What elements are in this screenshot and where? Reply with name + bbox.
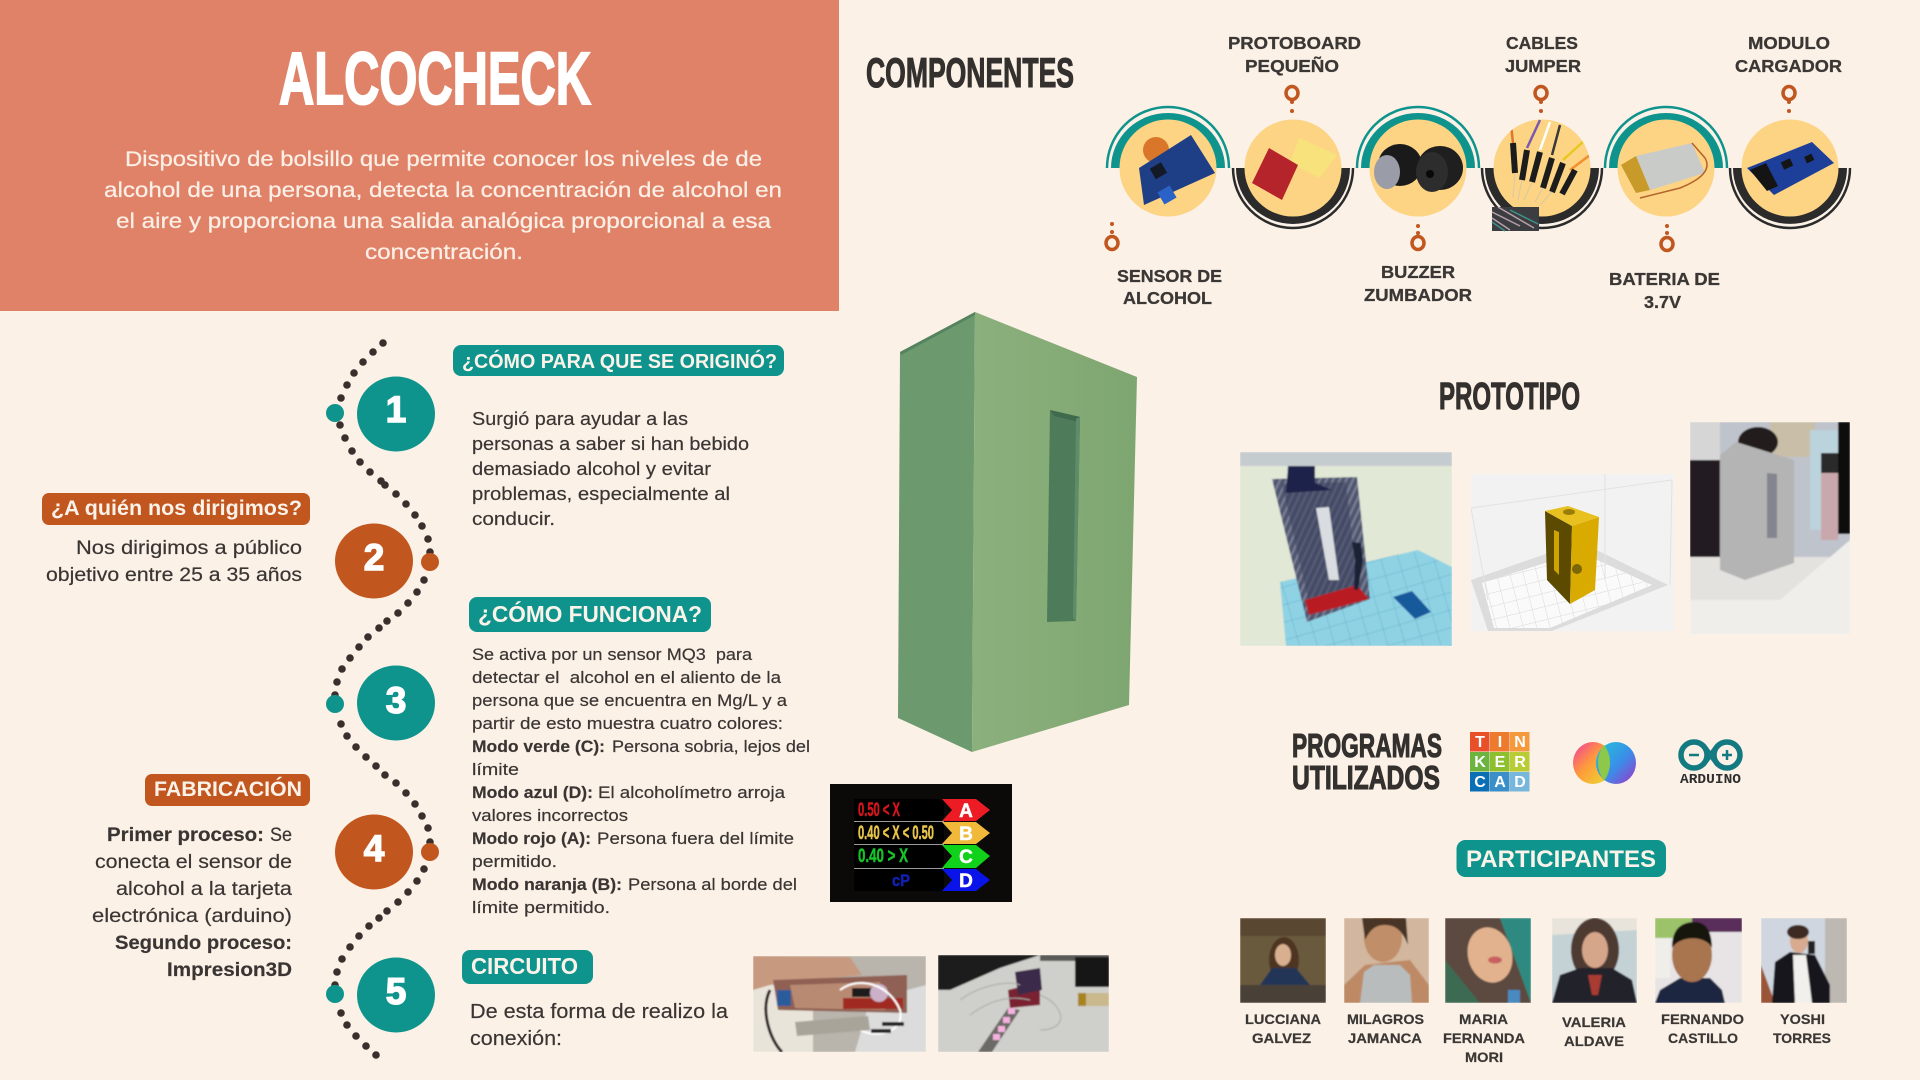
icon: tinkercad logo: R	[1514, 754, 1526, 771]
text block: how it works: Modo azul (D):	[472, 784, 593, 802]
image: slicer model	[1471, 474, 1674, 631]
name	[1245, 1011, 1321, 1046]
text block: description: Dispositivo de bolsillo que permite conocer los niveles de de	[125, 147, 762, 171]
step 5 marker: 5	[386, 971, 406, 1012]
text block: how it works: Se activa por un sensor MQ3 para	[472, 646, 753, 664]
component: buzzer	[1357, 107, 1479, 305]
panel: header	[0, 0, 839, 311]
label: PROTOBOARD	[1228, 33, 1361, 53]
text block: fabrication: Impresion3D	[167, 959, 292, 981]
participant: milagros	[1344, 914, 1429, 1046]
component: sensor de alcohol	[1106, 107, 1229, 308]
text block: how it works: Persona fuera del límite	[597, 830, 794, 848]
heading: fabricacion	[145, 774, 310, 806]
label	[1117, 266, 1222, 308]
image: alcohol level chart: D	[959, 871, 973, 892]
image: tinkercad model	[1240, 452, 1452, 646]
image: alcohol level chart: C	[959, 847, 973, 868]
heading: a quien nos dirigimos	[42, 493, 310, 525]
text block: origin: problemas, especialmente al	[472, 484, 730, 504]
text block: fabrication: alcohol a la tarjeta	[116, 878, 292, 900]
text block: fabrication: Segundo proceso:	[115, 932, 292, 954]
name: LUCCIANA	[1245, 1011, 1321, 1027]
text block: how it works: Persona al borde del	[628, 876, 797, 894]
label	[1735, 33, 1842, 76]
text block: how it works: valores incorrectos	[472, 807, 628, 825]
participant: fernando	[1655, 918, 1744, 1046]
icon: tinkercad logo: N	[1514, 734, 1526, 751]
label: MODULO	[1748, 33, 1830, 53]
image: alcohol level chart	[830, 784, 1012, 902]
heading: como para que se origino	[453, 345, 784, 376]
participant: yoshi	[1761, 918, 1847, 1046]
image: alcohol level chart: 0.40 < X < 0.50	[858, 823, 934, 844]
icon: tinkercad logo	[1470, 732, 1530, 792]
heading: fabricacion: FABRICACIÓN	[154, 777, 302, 801]
step 3 marker	[326, 666, 435, 740]
image: alcohol level chart: 0.50 < X	[858, 800, 900, 821]
label	[1609, 269, 1720, 312]
icon: tinkercad logo: T	[1475, 734, 1485, 751]
name: MORI	[1465, 1049, 1503, 1065]
photo: circuit with LEDs	[938, 955, 1109, 1052]
name: MARIA	[1459, 1011, 1508, 1027]
text block: description: concentración.	[365, 240, 523, 264]
step 5 marker	[326, 958, 435, 1032]
text block: fabrication: Primer proceso:	[107, 824, 264, 846]
icon: arduino logo: ARDUINO	[1680, 772, 1741, 788]
dotted timeline path	[331, 339, 434, 1059]
label: JUMPER	[1505, 56, 1581, 76]
heading: componentes: COMPONENTES	[866, 49, 1074, 96]
title: ALCOCHECK	[279, 37, 591, 120]
text block: how it works: partir de esto muestra cuatro colores:	[472, 715, 783, 733]
text block: origin: demasiado alcohol y evitar	[472, 459, 711, 479]
text block: description: alcohol de una persona, detecta la concentración de alcohol en	[104, 178, 782, 202]
text block: circuit: De esta forma de realizo la	[470, 1001, 729, 1023]
text block: how it works: El alcoholímetro arroja	[598, 784, 786, 802]
text block: how it works: límite permitido.	[472, 899, 610, 917]
text block: how it works: límite	[472, 761, 519, 779]
text block: origin: conducir.	[472, 509, 555, 529]
heading: programas utilizados: PROGRAMAS	[1292, 727, 1442, 764]
text block: origin: Surgió para ayudar a las	[472, 409, 688, 429]
overflow image corner	[1492, 207, 1539, 231]
component: cables jumper	[1482, 33, 1602, 231]
heading: como funciona: ¿CÓMO FUNCIONA?	[478, 600, 702, 627]
step 2 marker	[335, 524, 439, 598]
text block: audience: objetivo entre 25 a 35 años	[46, 565, 302, 586]
heading: programas utilizados: UTILIZADOS	[1292, 759, 1440, 796]
name	[1773, 1011, 1831, 1046]
photo: circuit in hand	[753, 956, 926, 1052]
image: alcohol level chart: B	[959, 824, 973, 845]
pin	[1106, 222, 1118, 250]
pin	[1783, 86, 1795, 113]
participant: maria	[1443, 918, 1531, 1065]
component: bateria	[1605, 107, 1727, 312]
heading: prototipo: PROTOTIPO	[1439, 376, 1580, 418]
text block: how it works: Modo verde (C):	[472, 738, 605, 756]
text block: circuit: conexión:	[470, 1028, 562, 1050]
icon: tinkercad logo: A	[1494, 774, 1506, 791]
name: ALDAVE	[1564, 1033, 1624, 1049]
text block: how it works: Modo rojo (A):	[472, 830, 591, 848]
icon: tinkercad logo: C	[1474, 774, 1486, 791]
pin	[1661, 224, 1673, 250]
text block: circuit	[470, 1001, 729, 1050]
name: CASTILLO	[1668, 1030, 1738, 1046]
label: PEQUEÑO	[1245, 55, 1339, 76]
heading: circuito: CIRCUITO	[471, 953, 578, 979]
text block: audience	[46, 538, 302, 586]
name: YOSHI	[1780, 1011, 1825, 1027]
heading: a quien nos dirigimos: ¿A quién nos dirigimos?	[51, 497, 302, 520]
heading: programas utilizados	[1292, 727, 1442, 796]
heading: circuito	[462, 950, 593, 984]
label: CABLES	[1506, 33, 1578, 53]
step 1 marker	[326, 376, 435, 452]
text block: how it works	[472, 646, 810, 917]
text block: audience: Nos dirigimos a público	[76, 538, 302, 559]
component: protoboard	[1228, 33, 1361, 228]
label: ZUMBADOR	[1364, 285, 1472, 305]
label: BUZZER	[1381, 262, 1455, 282]
name	[1347, 1011, 1424, 1046]
image: green 3D printed case	[898, 312, 1137, 752]
label	[1364, 262, 1472, 305]
step 4 marker: 4	[364, 828, 385, 869]
heading: como para que se origino: ¿CÓMO PARA QUE SE ORIGINÓ?	[462, 349, 777, 373]
text block: fabrication: conecta el sensor de	[95, 851, 292, 873]
name: FERNANDA	[1443, 1030, 1525, 1046]
text block: description	[104, 147, 782, 264]
heading: participantes: PARTICIPANTES	[1466, 846, 1656, 873]
pin	[1412, 224, 1424, 250]
label: CARGADOR	[1735, 56, 1842, 76]
name: GALVEZ	[1252, 1030, 1311, 1046]
text block: fabrication: electrónica (arduino)	[92, 905, 292, 927]
step 4 marker	[335, 814, 439, 890]
text block: fabrication: Se	[270, 824, 292, 846]
label	[1228, 33, 1361, 76]
component: modulo cargador	[1730, 33, 1850, 228]
label	[1505, 33, 1581, 76]
text block: how it works: permitido.	[472, 853, 557, 871]
heading: participantes	[1456, 840, 1666, 877]
text block: origin	[472, 409, 749, 529]
icon: tinkercad logo: E	[1495, 754, 1506, 771]
text block: how it works: Modo naranja (B):	[472, 876, 622, 894]
label: SENSOR DE	[1117, 266, 1222, 286]
name: VALERIA	[1562, 1014, 1626, 1030]
step 3 marker: 3	[386, 680, 406, 721]
pin	[1535, 86, 1547, 113]
participant: lucciana	[1240, 918, 1326, 1046]
name: TORRES	[1773, 1030, 1831, 1046]
name: FERNANDO	[1661, 1011, 1744, 1027]
pin	[1286, 86, 1298, 113]
name: MILAGROS	[1347, 1011, 1424, 1027]
text block: how it works: detectar el alcohol en el aliento de la	[472, 669, 782, 687]
participant: valeria	[1552, 918, 1637, 1049]
heading: como funciona	[469, 597, 711, 632]
icon: tinkercad logo: K	[1474, 754, 1486, 771]
name	[1562, 1014, 1626, 1049]
icon: tinkercad logo: I	[1498, 734, 1502, 751]
image: alcohol level chart: cP	[892, 871, 910, 890]
step 2 marker: 2	[364, 537, 384, 578]
icon: arduino logo	[1680, 742, 1741, 788]
text block: how it works: persona que se encuentra en Mg/L y a	[472, 692, 788, 710]
text block: description: el aire y proporciona una salida analógica proporcional a esa	[116, 209, 771, 233]
icon: tinkercad logo: D	[1514, 774, 1526, 791]
icon: colorful blob logo	[1573, 742, 1636, 784]
text block: origin: personas a saber si han bebido	[472, 434, 749, 454]
text block: fabrication	[92, 824, 292, 981]
image: alcohol level chart: 0.40 > X	[858, 846, 908, 867]
step 1 marker: 1	[386, 389, 406, 430]
label: ALCOHOL	[1123, 288, 1212, 308]
text block: how it works: Persona sobria, lejos del	[612, 738, 810, 756]
name	[1661, 1011, 1744, 1046]
label: BATERIA DE	[1609, 269, 1720, 289]
image: printed prototype photo	[1690, 422, 1850, 634]
image: alcohol level chart: A	[959, 801, 973, 822]
name: JAMANCA	[1348, 1030, 1422, 1046]
label: 3.7V	[1644, 292, 1681, 312]
name	[1443, 1011, 1525, 1065]
